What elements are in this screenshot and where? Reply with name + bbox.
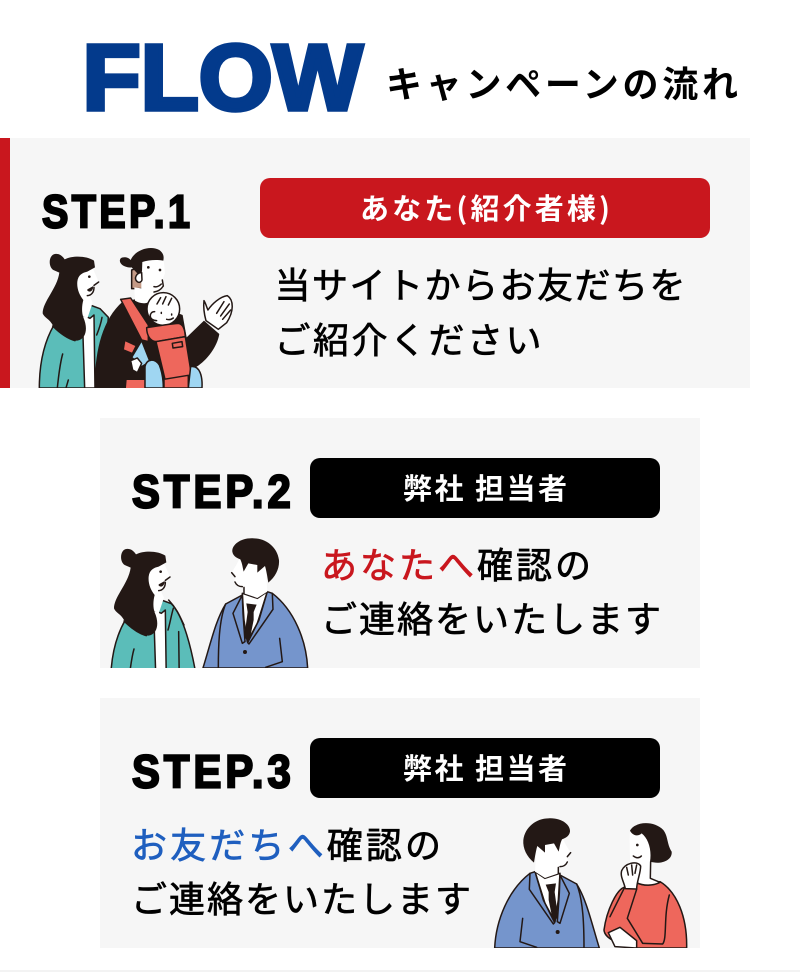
heading: FLOW: FLOW [82,26,363,130]
step 1 message: 当サイトからお友だちを [274,257,686,309]
panel: step 3 [100,698,700,948]
step 3 message [131,817,471,923]
step 1 message [274,257,686,364]
role badge: staff [310,458,660,518]
role badge: staff [310,738,660,798]
role badge: staff: 弊社 担当者 [403,466,567,508]
role badge: referrer [260,178,710,238]
panel background [0,138,750,388]
panel: step 2 [100,418,700,683]
footer rule [0,970,800,972]
friend [604,823,687,948]
staff member [495,818,599,948]
step 1 label: STEP.1 [42,187,193,238]
panel background [100,698,700,948]
step 3 label: STEP.3 [132,747,295,798]
role badge: referrer: あなた(紹介者様) [360,186,610,228]
step 3 message: ご連絡をいたします [131,871,471,923]
illustration: woman and man with baby [39,248,232,388]
staff member [203,538,308,668]
step 2 message: ご連絡をいたします [321,591,661,643]
panel background [100,418,700,668]
illustration: staff member and friend [495,818,687,948]
role badge: staff: 弊社 担当者 [403,746,567,788]
red accent bar [0,138,10,388]
step 2 message [321,537,661,643]
illustration: woman and staff member [111,538,308,683]
panel: step 1 [0,138,750,388]
woman [39,254,108,388]
step 2 message: あなたへ確認の [321,537,591,589]
title [82,26,738,130]
step 1 message: ご紹介ください [274,312,542,364]
man [95,248,232,388]
subheading: キャンペーンの流れ [386,56,738,108]
step 3 message: お友だちへ確認の [131,817,441,869]
woman [110,548,196,668]
step 2 label: STEP.2 [132,467,295,518]
